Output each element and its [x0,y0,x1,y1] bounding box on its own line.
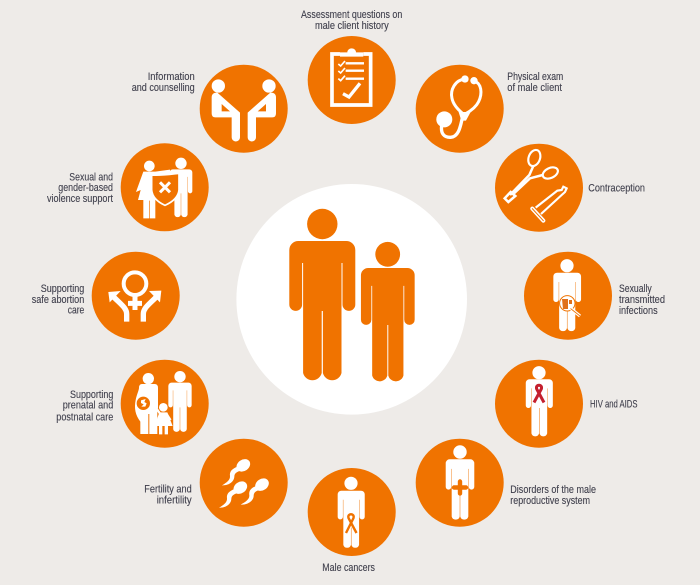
label: male client history [315,20,389,32]
item: disorders of the reproductive system [416,439,596,527]
icon: female symbol with arrows [108,272,161,322]
label: Disorders of the male [510,484,596,496]
item: fertility and infertility [144,439,288,527]
icon: man with red ribbon [526,366,553,436]
label: care [68,305,84,317]
label: violence support [47,193,113,205]
label: Physical exam [507,71,563,83]
label: safe abortion [32,294,84,306]
label [132,71,195,94]
item: assessment questions [301,9,402,124]
label: Assessment questions on [301,9,402,21]
item: safe abortion care [32,252,180,340]
icon: man with magnifier [553,259,581,331]
item: information and counselling [132,65,288,153]
icon: clipboard [332,48,371,105]
item: sexually transmitted infections [524,252,665,340]
icon: man with orange ribbon [338,477,365,548]
panel: central circle with man and boy [236,184,467,415]
label: gender-based [58,182,113,194]
label [47,171,113,205]
label: Contraception [588,182,645,194]
icon: forceps and condom [505,148,567,221]
label: infertility [157,494,192,506]
icon: boy [361,242,415,381]
label: Supporting [41,283,84,295]
item: prenatal and postnatal care [56,360,209,448]
item: physical exam [416,65,563,153]
item: HIV and AIDS [495,360,638,448]
label: Information [148,71,195,83]
label: Sexually [619,283,652,295]
label [301,9,402,32]
label: postnatal care [56,411,113,423]
label: Supporting [70,389,113,401]
label [510,484,596,507]
icon: family [135,371,192,434]
icon: man [289,209,355,380]
label: Sexual and [69,171,113,183]
label: reproductive system [510,495,590,507]
label: HIV and AIDS [590,399,638,411]
item: contraception [495,144,645,232]
icon: couple with shield [136,158,192,218]
label [56,389,113,423]
icon: two people seated [212,79,276,141]
label [507,71,563,94]
item: male cancers [308,468,396,574]
label: and counselling [132,82,195,94]
label [144,484,192,506]
label [619,283,665,317]
icon: stethoscope [436,75,481,137]
label: prenatal and [63,400,113,412]
label [32,283,84,317]
label: Male cancers [322,562,375,574]
icon: man with plus [446,445,474,520]
label: of male client [507,82,562,94]
label: Fertility and [144,484,192,496]
icon: sperm [219,456,271,508]
label: infections [619,305,658,317]
item: sexual and gender-based violence support [47,143,209,231]
label: transmitted [619,294,665,306]
